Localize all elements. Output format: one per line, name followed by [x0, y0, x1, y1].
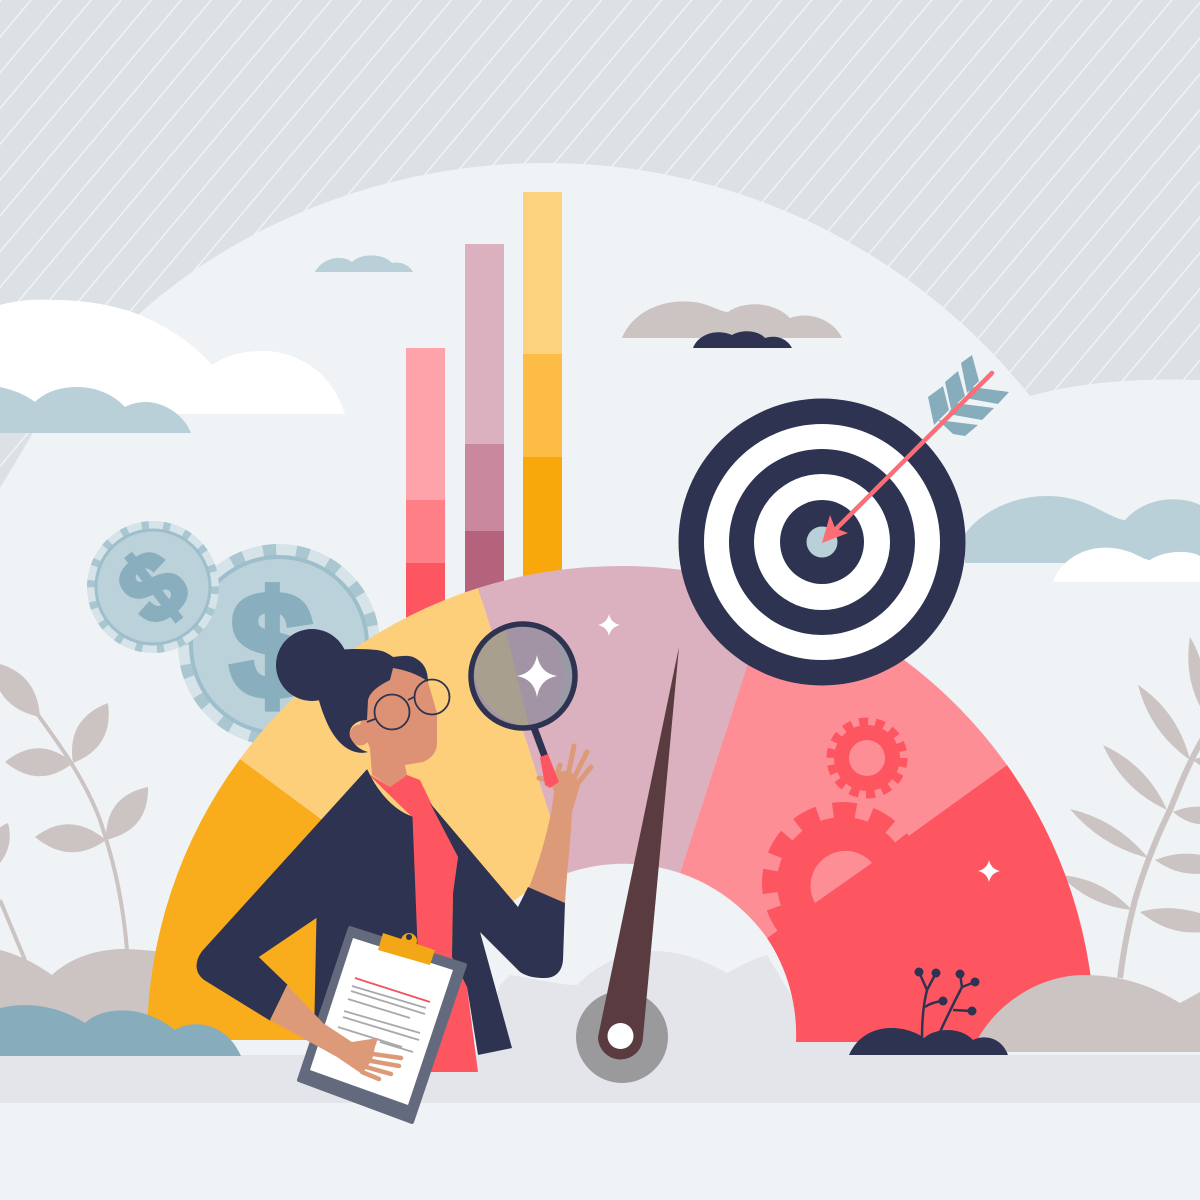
hill: grey inside gauge [480, 951, 860, 1060]
left forearm and hand [270, 985, 401, 1079]
icon: small coin: $ [99, 529, 207, 646]
clipboard [299, 928, 465, 1122]
plant: right [1060, 637, 1200, 978]
gauge segment: light red [680, 590, 1007, 938]
icon: small gear [831, 722, 903, 794]
gauge segment: orange [147, 759, 479, 1040]
gauge needle [576, 647, 679, 1083]
red top [367, 773, 478, 1072]
hair [276, 629, 428, 753]
cloud: white right [1053, 548, 1200, 582]
sparkle: on gauge pink [598, 614, 620, 636]
woman [197, 629, 591, 1122]
ear [350, 724, 370, 746]
sparkle: on gauge red [978, 860, 1000, 882]
target [678, 398, 966, 686]
magnifying glass [471, 624, 575, 788]
cloud: small blue top [315, 255, 413, 272]
cloud: beige [622, 301, 842, 338]
plant: left [0, 662, 148, 960]
cloud: large white top left [0, 300, 345, 414]
jacket [197, 770, 565, 1055]
neck and face [360, 660, 437, 787]
gauge [147, 566, 1095, 1042]
hill: beige left [0, 949, 175, 1040]
gauge segment: yellow [240, 588, 568, 936]
ground band [0, 1055, 1200, 1103]
cloud: blue right [965, 496, 1200, 563]
hill: beige right [972, 975, 1200, 1052]
arrow in target [822, 355, 1009, 543]
gauge segment: pink [478, 566, 772, 873]
icon: large coin: $ [230, 561, 314, 729]
bar chart [406, 192, 562, 623]
cloud: blue left [0, 387, 191, 433]
cloud: dark navy [693, 331, 792, 348]
hill: blue left [0, 1005, 241, 1056]
icon: large gear [770, 810, 916, 956]
right forearm and hand [528, 746, 591, 905]
striped sky background [0, 0, 1200, 520]
gauge segment: red [767, 765, 1095, 1042]
glasses [367, 680, 450, 730]
icon: large coin [178, 544, 380, 746]
plant: dark navy bush [849, 968, 1008, 1055]
